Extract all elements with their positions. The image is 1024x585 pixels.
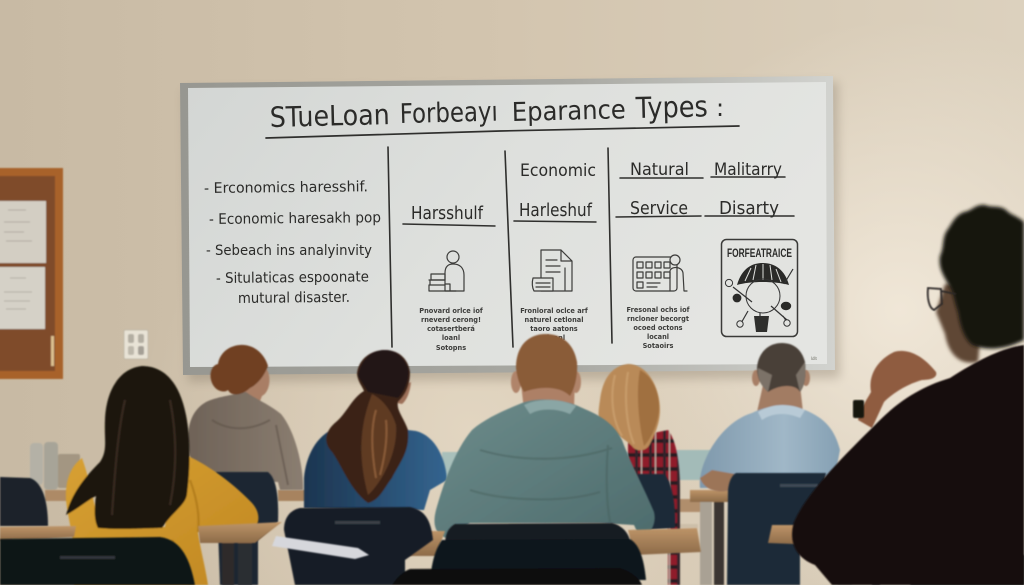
icon: forfeatraice badge: FORFEATRAICE: [727, 246, 792, 260]
shirt collar: [758, 405, 805, 420]
watch: [853, 400, 864, 418]
shirt collar: [524, 400, 576, 414]
left bullet list: - Economic haresakh pop: [209, 210, 381, 228]
desk right: [768, 525, 822, 545]
description: ocoed octons: [633, 324, 683, 332]
hair: [757, 343, 805, 392]
heading: Malitarry: [714, 160, 782, 180]
whiteboard: [180, 76, 840, 382]
shirt: [700, 406, 840, 488]
ears: [752, 370, 760, 386]
description: rneverd cerong!: [421, 316, 481, 324]
subheading: Service: [630, 199, 688, 219]
desk centre: [378, 531, 445, 556]
whiteboard shadow: [184, 82, 840, 382]
column 4: Malitarry Disarty: [705, 160, 798, 336]
student: light blue chair: [727, 473, 826, 585]
title underline: [266, 126, 739, 138]
subheading: Disarty: [719, 199, 779, 219]
description: [520, 307, 588, 342]
description: taoro aatons: [530, 325, 578, 333]
description: Fresonal ochs iof: [627, 306, 690, 314]
description: cotasertberá: [427, 325, 475, 333]
crown of hair: [358, 350, 409, 398]
cork notice board: [0, 168, 63, 379]
shirt: [434, 400, 655, 538]
student: light blue shirt: [700, 343, 840, 492]
board title: Forbeayı: [399, 97, 498, 130]
column 3: Natural Service: [616, 160, 703, 350]
foreground student in black: [792, 205, 1024, 585]
front row desks: [0, 522, 889, 585]
column 2: Economic Harleshuf: [514, 161, 596, 342]
left bullet list: mutural disaster.: [238, 290, 350, 307]
ponytail highlight: [361, 394, 396, 495]
student: blue top with ponytail: [304, 350, 447, 510]
notice board clip: [51, 336, 54, 366]
hand and wrist: [858, 351, 936, 428]
hair strands: [112, 400, 175, 515]
hair: [516, 334, 577, 396]
whiteboard frame: [180, 76, 835, 375]
board title: [269, 89, 724, 134]
neck and ears: [520, 375, 575, 410]
glasses: [928, 288, 956, 310]
left bullet list: - Situlaticas espoonate: [216, 269, 369, 287]
description: Pnovard orlce iof: [419, 307, 483, 315]
left bullet list: - Sebeach ins analyinvity: [206, 243, 372, 259]
back row desks: [45, 490, 730, 585]
description: loanl: [442, 334, 460, 342]
corner mark: ldlt: [811, 356, 818, 361]
description: loanl: [547, 334, 565, 342]
neck and face: [238, 368, 269, 406]
student: teal shirt man: [434, 334, 655, 538]
front row chairs: [0, 507, 1024, 585]
board title: STueLoan: [269, 98, 390, 134]
description: [419, 307, 483, 352]
heading: Natural: [630, 160, 689, 180]
description: [627, 306, 690, 350]
hair: [598, 364, 660, 450]
column 1: Harsshulf: [403, 203, 495, 352]
description: Fronloral oclce arf: [520, 307, 588, 315]
hair: [326, 350, 410, 503]
sweater: [66, 456, 258, 585]
subheading: Harleshuf: [519, 200, 593, 221]
light switch: [124, 330, 148, 359]
forearm: [700, 470, 735, 492]
shirt folds: [470, 445, 612, 522]
description: Sotaoirs: [643, 342, 673, 350]
pinned paper top: [0, 201, 46, 263]
board title: :: [716, 94, 724, 122]
sweater folds: [172, 480, 199, 585]
desk left: [0, 526, 76, 541]
student: yellow sweater: [66, 366, 258, 585]
icon: person with books: [429, 251, 464, 291]
icon: calendar with person: [633, 255, 687, 291]
description: locanl: [647, 333, 669, 341]
student: plaid shirt with blonde hair: [598, 364, 680, 585]
rear wall ledge: [442, 450, 711, 480]
left bullet list: [204, 179, 381, 307]
description: rncloner becorgt: [627, 315, 689, 323]
sweater folds: [212, 420, 288, 485]
plaid shirt: [628, 430, 680, 585]
pinned paper bottom: [0, 267, 45, 329]
icon: document stack: [532, 250, 572, 291]
description: naturel cetlonal: [524, 316, 584, 324]
whiteboard surface: [188, 82, 827, 367]
heading: Economic: [520, 161, 596, 181]
hair: [66, 366, 190, 529]
face edge: [392, 382, 411, 404]
description: Sotopns: [436, 344, 466, 352]
body: [792, 345, 1024, 585]
torso: [304, 428, 447, 510]
heading: Harsshulf: [411, 203, 484, 224]
hair: [210, 345, 268, 394]
back row chairs: [0, 472, 675, 585]
board title: Types: [634, 89, 708, 125]
student: grey top with bun: [188, 345, 303, 490]
paper on desk: [272, 536, 369, 559]
left bullet list: - Erconomics haresshif.: [204, 179, 368, 197]
board title: Eparance: [511, 95, 626, 128]
water bottles on back desk: [30, 442, 80, 490]
neck: [757, 385, 803, 412]
icon: forfeatraice badge: [722, 240, 798, 336]
face: [936, 284, 985, 363]
torso: [188, 392, 303, 490]
column dividers: [388, 147, 612, 347]
curly hair: [940, 205, 1024, 349]
